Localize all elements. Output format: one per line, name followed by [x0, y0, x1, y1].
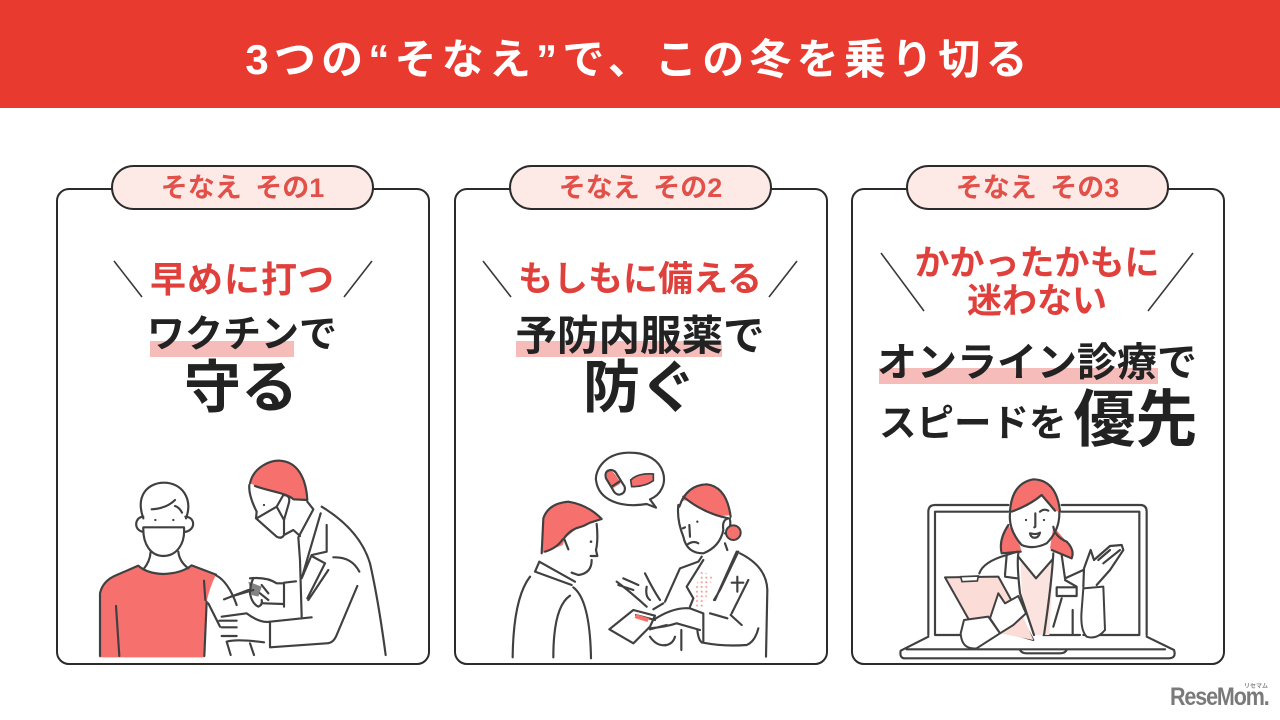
highlight marker [516, 341, 722, 357]
badge: そなえ その3: そなえ その3 [956, 173, 1119, 203]
main text line: スピードを優先: スピードを優先 [879, 386, 1198, 455]
accent slashes [880, 252, 1194, 312]
badge: そなえ その2 [509, 165, 772, 210]
accent slashes [114, 260, 372, 298]
main text line: 予防内服薬で: 予防内服薬で [515, 312, 764, 359]
logo: ReseMom: リセマム [1244, 684, 1268, 690]
main text line: 防ぐ: 防ぐ [583, 356, 697, 420]
heading accent: もしもに備える: もしもに備える [518, 260, 762, 299]
title banner [0, 0, 1280, 108]
heading accent: かかったかもに 迷わない: かかったかもに [914, 244, 1160, 283]
main text line: オンライン診療で: オンライン診療で [877, 341, 1197, 385]
badge: そなえ その1: そなえ その1 [161, 173, 324, 203]
panel: そなえ その2 [454, 165, 828, 665]
highlight marker [150, 341, 294, 357]
illustration: vaccination [98, 460, 387, 658]
logo: ReseMom: ReseMom. [1170, 683, 1269, 711]
badge: そなえ その3 [906, 165, 1169, 210]
illustration: online consultation laptop [899, 478, 1176, 660]
panel: そなえ その3 [851, 165, 1225, 665]
illustration: pharmacist consult [512, 452, 768, 660]
badge: そなえ その1 [111, 165, 374, 210]
main text line: 守る: 守る [184, 356, 298, 420]
highlight marker [879, 368, 1158, 384]
title: 3つの“そなえ”で、この冬を乗り切る [245, 36, 1033, 83]
panel: そなえ その1 [56, 165, 430, 665]
heading accent: かかったかもに 迷わない [914, 244, 1160, 321]
heading accent: 早めに打つ: 早めに打つ [150, 259, 335, 300]
badge: そなえ その2: そなえ その2 [559, 173, 722, 203]
main text line: ワクチンで: ワクチンで [147, 314, 337, 356]
accent slashes [482, 260, 798, 298]
heading accent: かかったかもに 迷わない: 迷わない [967, 282, 1107, 321]
